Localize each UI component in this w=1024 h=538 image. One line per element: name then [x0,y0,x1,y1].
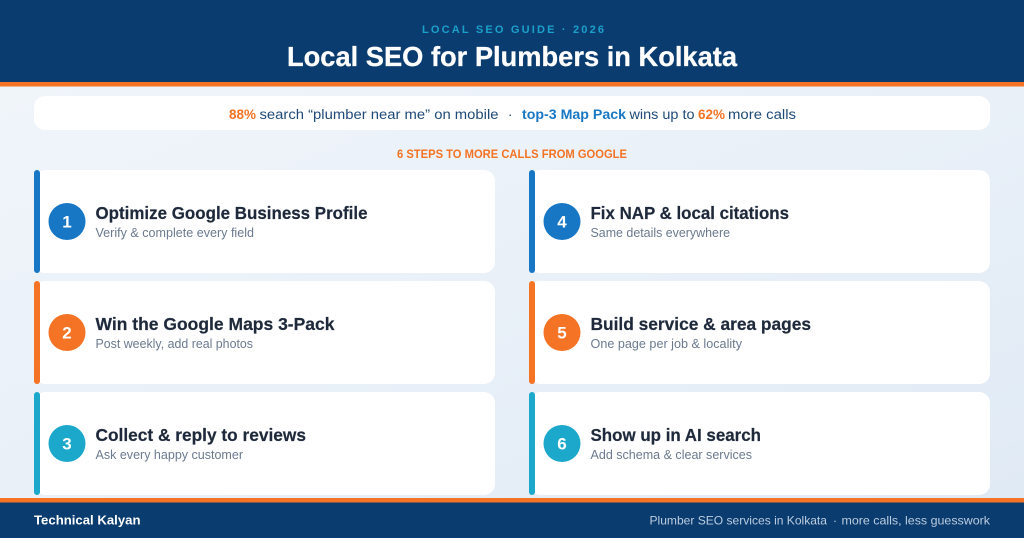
card: step 1: Verify & complete every field [96,226,254,240]
card: step 6: Add schema & clear services [590,448,752,462]
card: step 3: Collect & reply to reviews [96,425,306,445]
card: step 5: One page per job & locality [590,337,743,351]
header banner [0,0,1024,86]
card: step 1: 1 [62,212,72,232]
section heading: 6 STEPS TO MORE CALLS FROM GOOGLE [397,147,627,161]
stat band: more calls [728,107,796,122]
footer tagline: Plumber SEO services in Kolkata [650,514,827,528]
card: step 2 [34,281,495,384]
card: step 2: Win the Google Maps 3-Pack [96,314,335,334]
footer tagline: more calls, less guesswork [842,514,991,528]
card: step 6: 6 [557,434,567,454]
eyebrow label: LOCAL SEO GUIDE · 2026 [422,24,604,36]
stat band [34,96,990,130]
stat band: wins up to [628,107,694,122]
card: step 5 [529,281,990,384]
card: step 1 [34,170,495,273]
card: step 4: 4 [557,212,567,232]
footer [0,498,1024,538]
stat band: 88% [229,107,256,122]
footer tagline [650,514,991,528]
card: step 2: 2 [62,324,72,342]
stat band: top-3 Map Pack [522,107,627,122]
card: step 4 [529,170,990,273]
card: step 1: Optimize Google Business Profile [96,203,368,223]
card: step 2: Post weekly, add real photos [96,337,253,351]
card: step 4: Same details everywhere [590,226,730,240]
stat band: 62% [698,107,725,122]
card: step 6 [529,392,990,495]
card: step 5: 5 [557,324,567,342]
footer tagline: · [833,514,837,528]
card: step 3 [34,392,495,495]
stat band: search “plumber near me” on mobile [260,107,498,122]
card: step 6: Show up in AI search [590,425,761,445]
card: step 5: Build service & area pages [590,314,811,334]
brand name: Technical Kalyan [34,514,140,528]
stat band: · [508,107,512,122]
title: Local SEO for Plumbers in Kolkata [287,41,738,72]
card: step 4: Fix NAP & local citations [590,203,789,223]
card: step 3: Ask every happy customer [96,448,243,462]
card: step 3: 3 [62,434,72,454]
